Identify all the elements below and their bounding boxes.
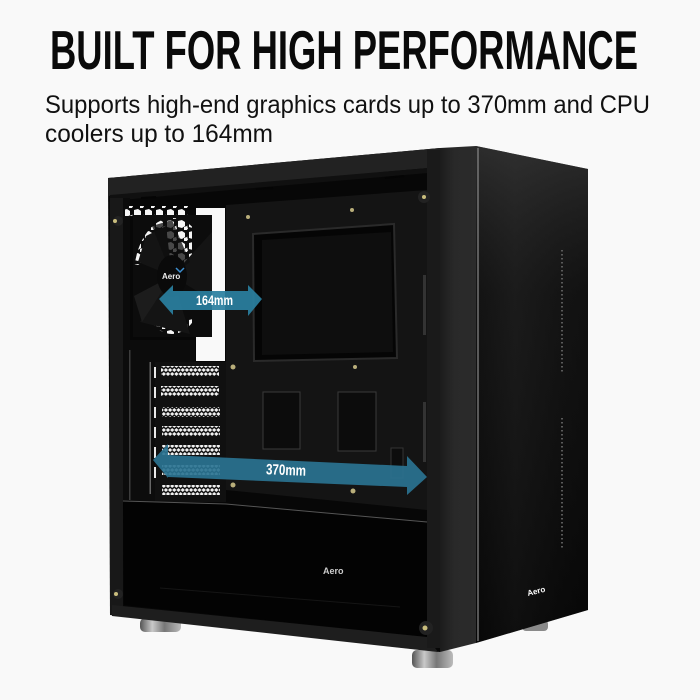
corner screws bbox=[113, 191, 433, 635]
side frame bbox=[427, 150, 441, 648]
front logo: Aero bbox=[526, 585, 546, 598]
PSU shroud bbox=[123, 501, 427, 637]
fan logo: Aero bbox=[162, 272, 180, 281]
CPU cutout bbox=[253, 224, 397, 361]
case feet bbox=[140, 618, 548, 668]
top panel bbox=[108, 148, 440, 196]
top panel slots bbox=[141, 176, 404, 198]
standoffs bbox=[230, 208, 357, 494]
arrow: 164mm CPU cooler clearance: 164mm bbox=[196, 292, 233, 308]
illustration: PC case bbox=[108, 146, 588, 668]
arrow: 370mm graphics card clearance: 370mm bbox=[266, 461, 306, 480]
arrow: 370mm graphics card clearance bbox=[153, 444, 427, 495]
subtitle: Supports high-end graphics cards up to 370mm and CPU bbox=[45, 91, 650, 119]
shroud logo: Aero bbox=[323, 566, 344, 576]
fan bbox=[133, 215, 212, 337]
bottom rail bbox=[112, 605, 438, 652]
subtitle: coolers up to 164mm bbox=[45, 120, 273, 148]
white rear opening bbox=[196, 208, 225, 361]
tray cutouts bbox=[263, 392, 300, 449]
motherboard tray bbox=[226, 190, 427, 510]
arrow: 164mm CPU cooler clearance bbox=[159, 285, 262, 316]
case body interior bbox=[108, 148, 440, 652]
front glass panel bbox=[476, 146, 588, 643]
fan logo mark bbox=[176, 268, 184, 272]
rear left frame bbox=[110, 198, 195, 615]
expansion slots bbox=[154, 362, 226, 502]
